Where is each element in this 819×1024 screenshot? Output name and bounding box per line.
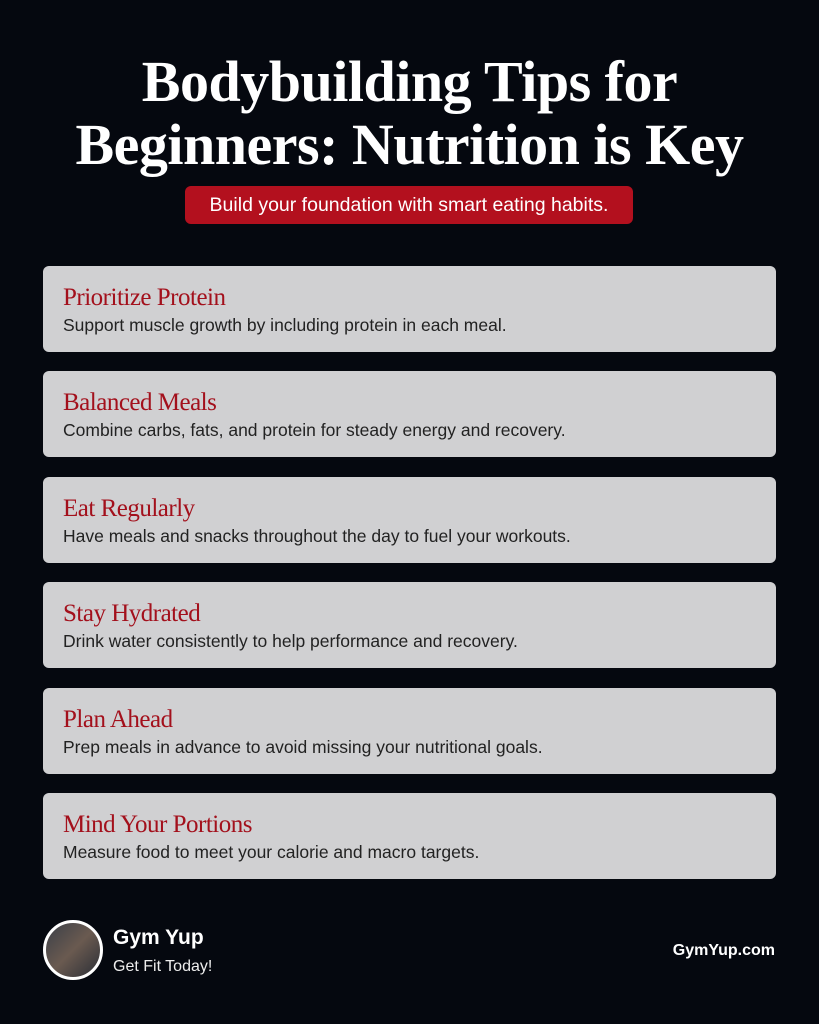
title: Bodybuilding Tips for xyxy=(142,49,677,114)
card: plan ahead: Prep meals in advance to avoid missing your nutritional goals. xyxy=(63,737,543,757)
card: stay hydrated: Stay Hydrated xyxy=(63,600,200,627)
card: mind your portions xyxy=(43,793,776,879)
card: prioritize protein xyxy=(43,266,776,352)
card: stay hydrated xyxy=(43,582,776,668)
website url: GymYup.com xyxy=(673,942,775,959)
card: balanced meals xyxy=(43,371,776,457)
card: plan ahead xyxy=(43,688,776,774)
subtitle banner xyxy=(185,186,633,224)
brand name: Gym Yup xyxy=(113,926,204,949)
card: plan ahead: Plan Ahead xyxy=(63,706,173,733)
icon: logo avatar xyxy=(43,920,103,980)
card: eat regularly: Have meals and snacks throughout the day to fuel your workouts. xyxy=(63,526,571,546)
card: balanced meals: Combine carbs, fats, and protein for steady energy and recovery. xyxy=(63,420,566,440)
title xyxy=(76,49,744,177)
tagline: Get Fit Today! xyxy=(113,958,212,975)
card: mind your portions: Measure food to meet your calorie and macro targets. xyxy=(63,842,479,862)
card: balanced meals: Balanced Meals xyxy=(63,389,216,416)
card: prioritize protein: Support muscle growth by including protein in each meal. xyxy=(63,315,507,335)
card: prioritize protein: Prioritize Protein xyxy=(63,284,226,311)
card: mind your portions: Mind Your Portions xyxy=(63,811,252,838)
card: eat regularly xyxy=(43,477,776,563)
card: stay hydrated: Drink water consistently to help performance and recovery. xyxy=(63,631,518,651)
title: Beginners: Nutrition is Key xyxy=(76,112,743,177)
card: eat regularly: Eat Regularly xyxy=(63,495,195,522)
subtitle banner: Build your foundation with smart eating habits. xyxy=(210,194,608,216)
